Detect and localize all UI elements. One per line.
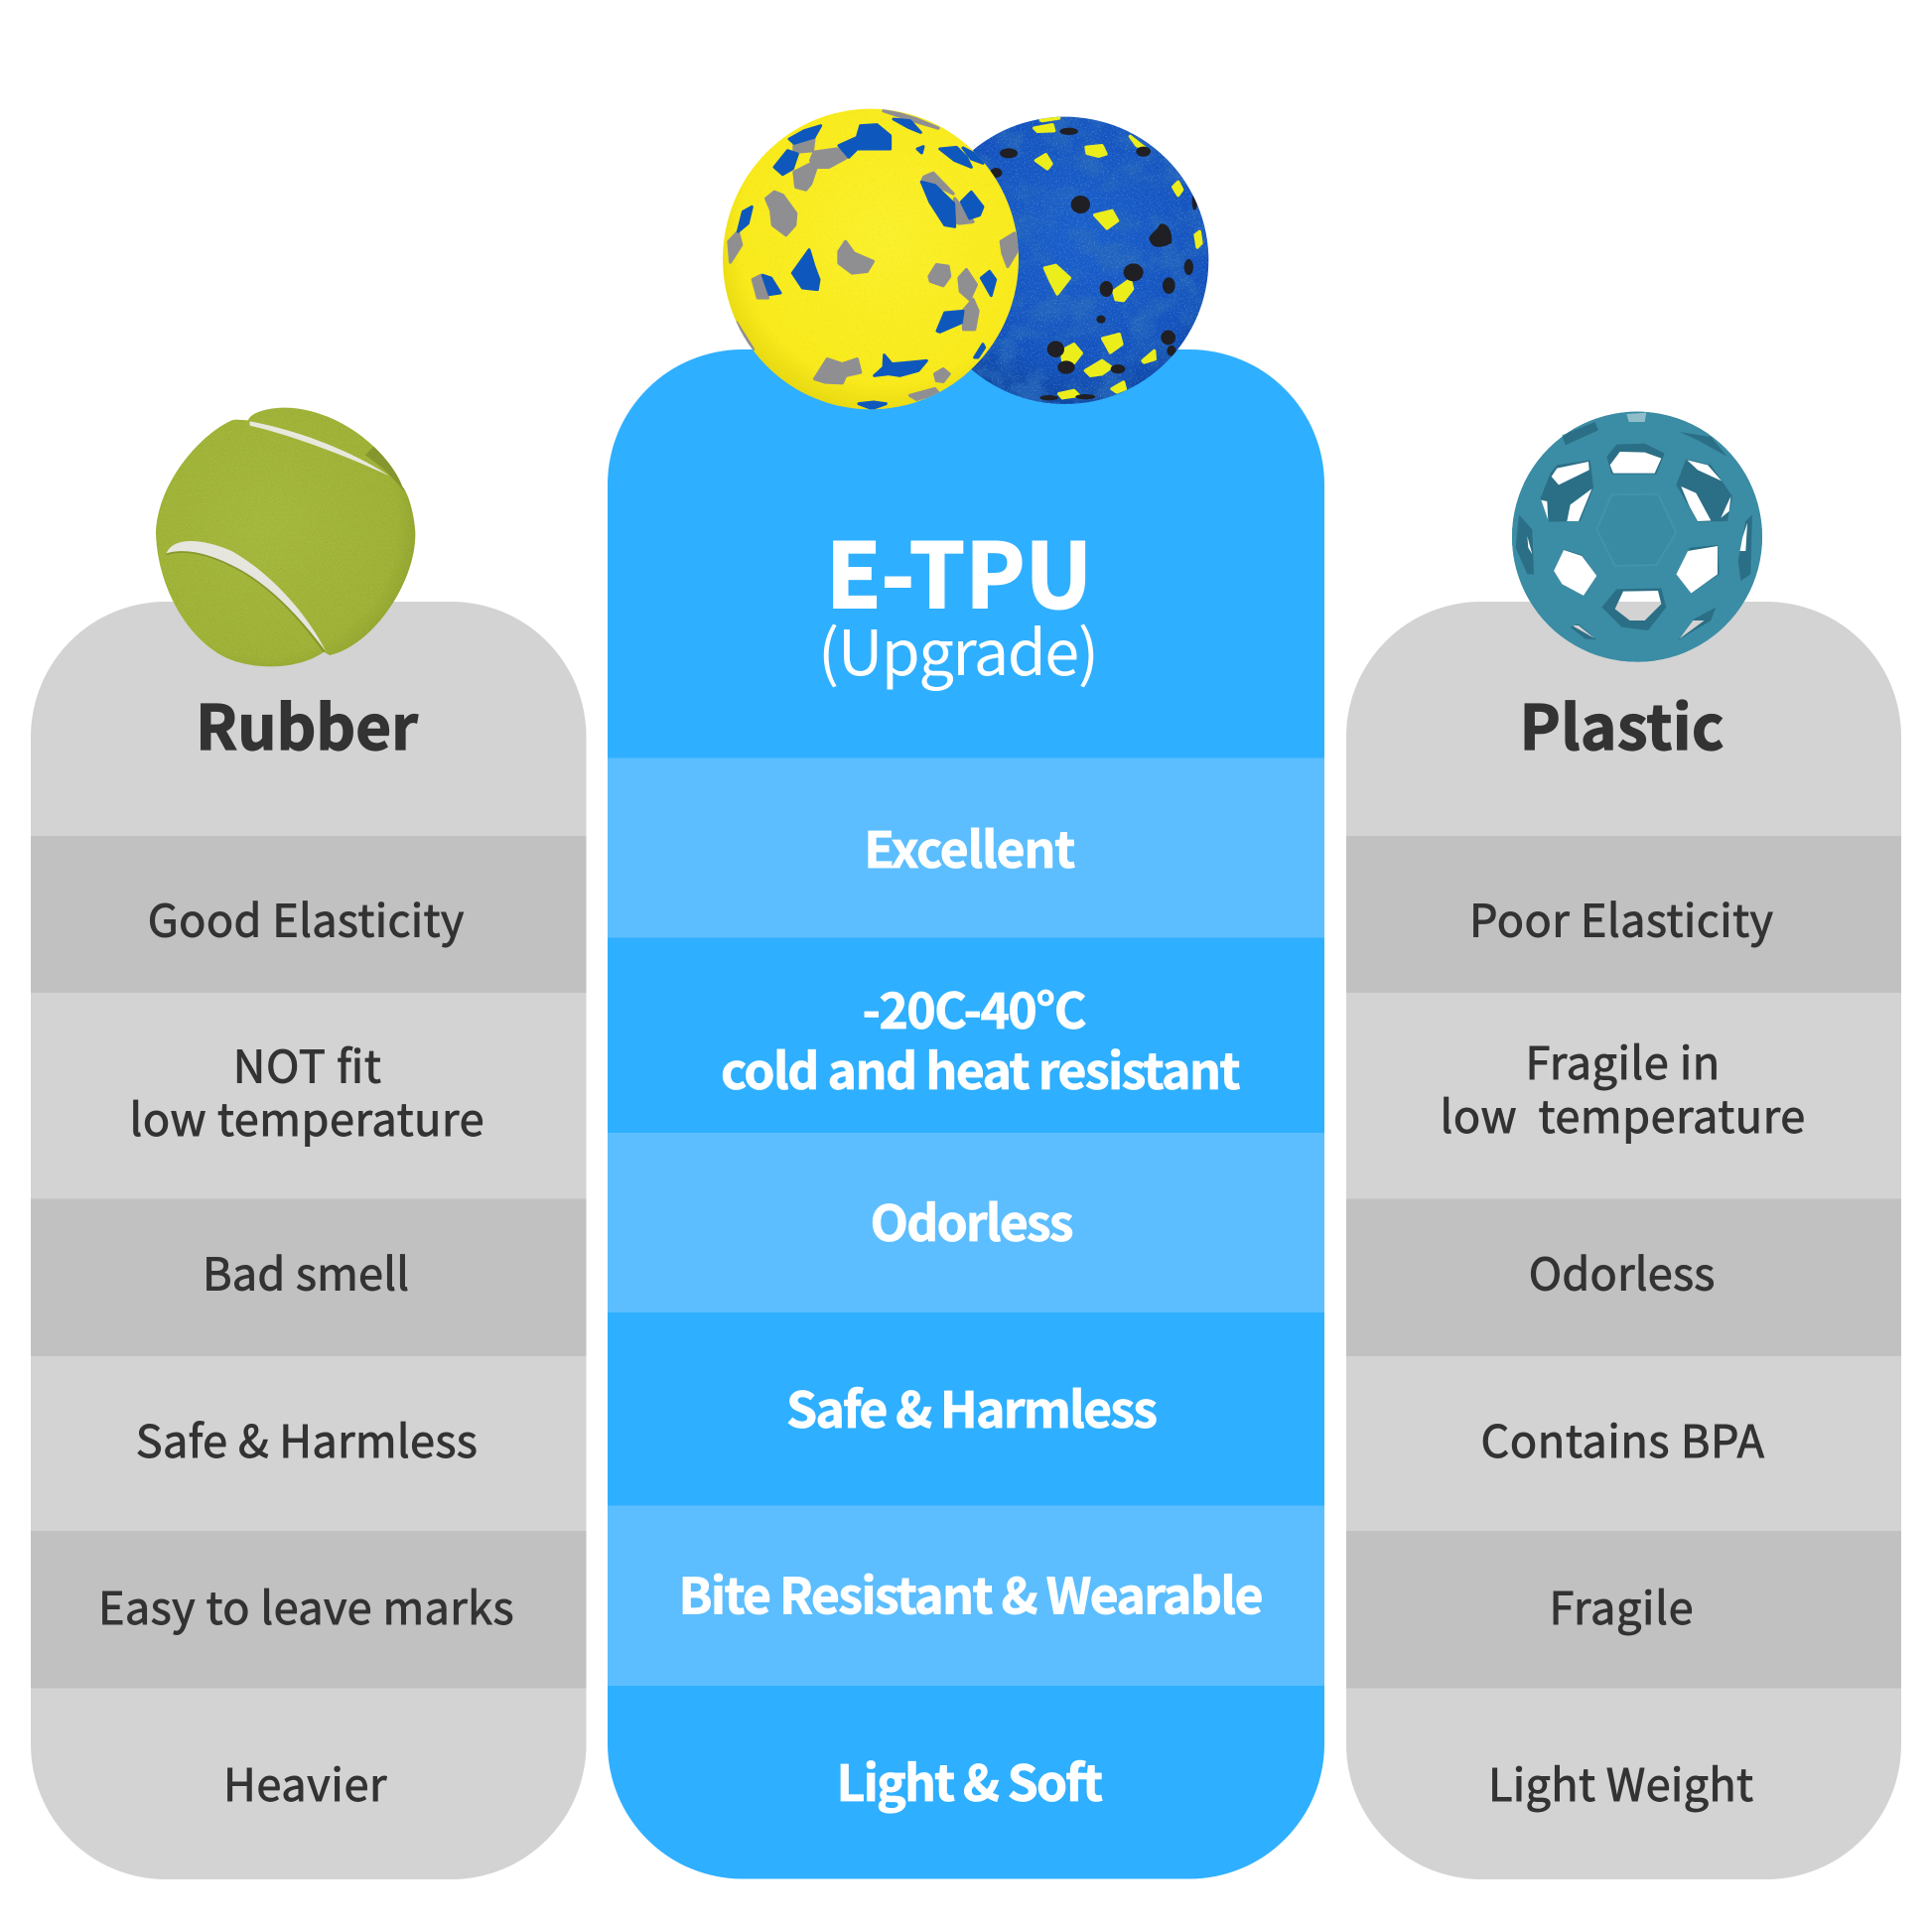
text: poor elasticity: Poor Elasticity xyxy=(1469,886,1773,949)
heading: Rubber: Rubber xyxy=(196,678,419,767)
heading: E-TPU: E-TPU xyxy=(826,504,1092,633)
text: fragile in low temperature: Fragile in xyxy=(1525,1028,1720,1092)
text: cold and heat resistant: cold and heat resistant xyxy=(721,1033,1241,1104)
text: cold and heat resistant: -20C-40°C xyxy=(862,972,1086,1043)
text: cold and heat resistant xyxy=(721,972,1241,1104)
text: excellent: Excellent xyxy=(864,811,1075,883)
text: bite resistant and wearable: Bite Resistant & Wearable xyxy=(679,1557,1263,1628)
text: safe and harmless: Safe & Harmless xyxy=(136,1406,478,1470)
icon: teal hollow plastic ball xyxy=(1512,412,1762,662)
text: contains BPA: Contains BPA xyxy=(1481,1406,1765,1470)
icon: yellow E-TPU ball xyxy=(722,107,1020,410)
text: odorless: Odorless xyxy=(870,1184,1074,1256)
text: light and soft: Light & Soft xyxy=(836,1744,1103,1816)
text: light weight: Light Weight xyxy=(1488,1749,1753,1814)
heading: Plastic: Plastic xyxy=(1519,678,1724,767)
text: safe and harmless: Safe & Harmless xyxy=(786,1371,1158,1443)
icon: blue E-TPU ball xyxy=(971,117,1209,404)
panel: rubber column xyxy=(31,602,586,1879)
front lattice of ball xyxy=(1512,412,1762,662)
text: easy to leave marks: Easy to leave marks xyxy=(98,1573,514,1637)
text: fragile: Fragile xyxy=(1549,1573,1694,1637)
text: odorless: Odorless xyxy=(1529,1239,1715,1303)
panel: plastic column xyxy=(1346,602,1901,1879)
text: heavier: Heavier xyxy=(223,1749,387,1814)
text: not fit low temperature: NOT fit xyxy=(233,1031,381,1096)
subheading: upgrade: (Upgrade) xyxy=(818,604,1099,694)
text: fragile in low temperature xyxy=(1440,1028,1805,1146)
text: not fit low temperature: low temperature xyxy=(129,1084,484,1149)
panel: E-TPU column xyxy=(608,349,1324,1878)
text: fragile in low temperature: low temperature xyxy=(1440,1081,1805,1146)
icon: green rubber tennis ball xyxy=(149,404,424,675)
text: bad smell: Bad smell xyxy=(203,1239,409,1303)
back structure of ball xyxy=(1512,412,1762,662)
text: good elasticity: Good Elasticity xyxy=(148,886,464,949)
text: not fit low temperature xyxy=(129,1031,484,1149)
